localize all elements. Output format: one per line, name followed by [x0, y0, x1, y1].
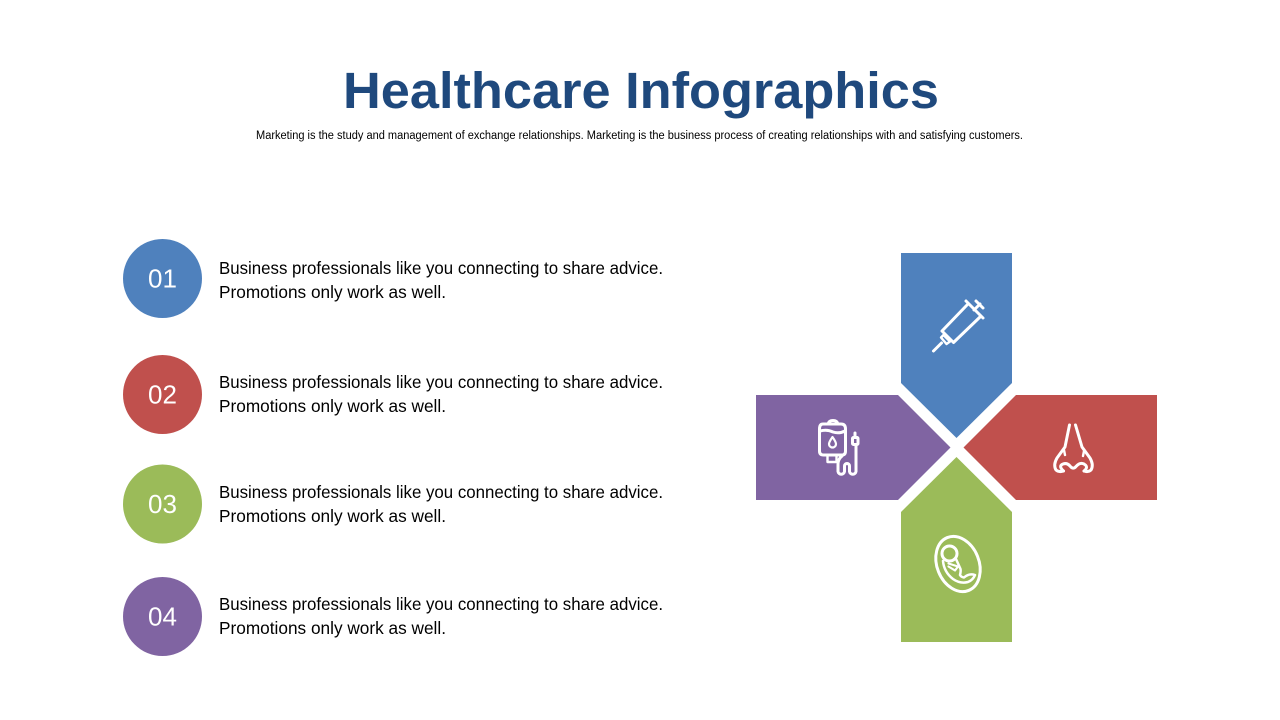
icon: syringe [934, 301, 983, 351]
title: Healthcare Infographics [343, 62, 939, 119]
text 04: Promotions only work as well. [219, 618, 446, 638]
text 02: Business professionals like you connecting to share advice. [219, 372, 663, 392]
text 02 [219, 372, 663, 416]
text 03: Promotions only work as well. [219, 506, 446, 526]
list item 02 [123, 355, 663, 434]
text 04 [219, 594, 663, 638]
text 03: Business professionals like you connecting to share advice. [219, 482, 663, 502]
badge 04 [123, 577, 202, 656]
arrow: purple left [756, 395, 950, 500]
list item 03 [123, 464, 663, 544]
text 01 [219, 258, 663, 302]
text 03 [219, 482, 663, 526]
text 01: Business professionals like you connecting to share advice. [219, 258, 663, 278]
badge 02 [123, 355, 202, 434]
text 02: Promotions only work as well. [219, 396, 446, 416]
icon: IV bag [820, 420, 858, 474]
badge 04: 04 [148, 602, 177, 632]
list item 04 [123, 577, 663, 656]
icon: nose [1055, 425, 1092, 472]
arrow: green bottom [901, 457, 1012, 642]
arrow: red right [964, 395, 1157, 500]
text 01: Promotions only work as well. [219, 282, 446, 302]
text 04: Business professionals like you connecting to share advice. [219, 594, 663, 614]
cross diagram [756, 253, 1157, 642]
badge 02: 02 [148, 380, 177, 410]
badge 01 [123, 239, 202, 318]
icon: fetus [928, 530, 988, 598]
badge 03 [123, 464, 202, 544]
subtitle: Marketing is the study and management of exchange relationships. Marketing is the business process of creating relationships with and satisfying customers. [256, 130, 1023, 142]
badge 01: 01 [148, 264, 177, 294]
arrow: blue top [901, 253, 1012, 438]
list item 01 [123, 239, 663, 318]
badge 03: 03 [148, 489, 177, 519]
